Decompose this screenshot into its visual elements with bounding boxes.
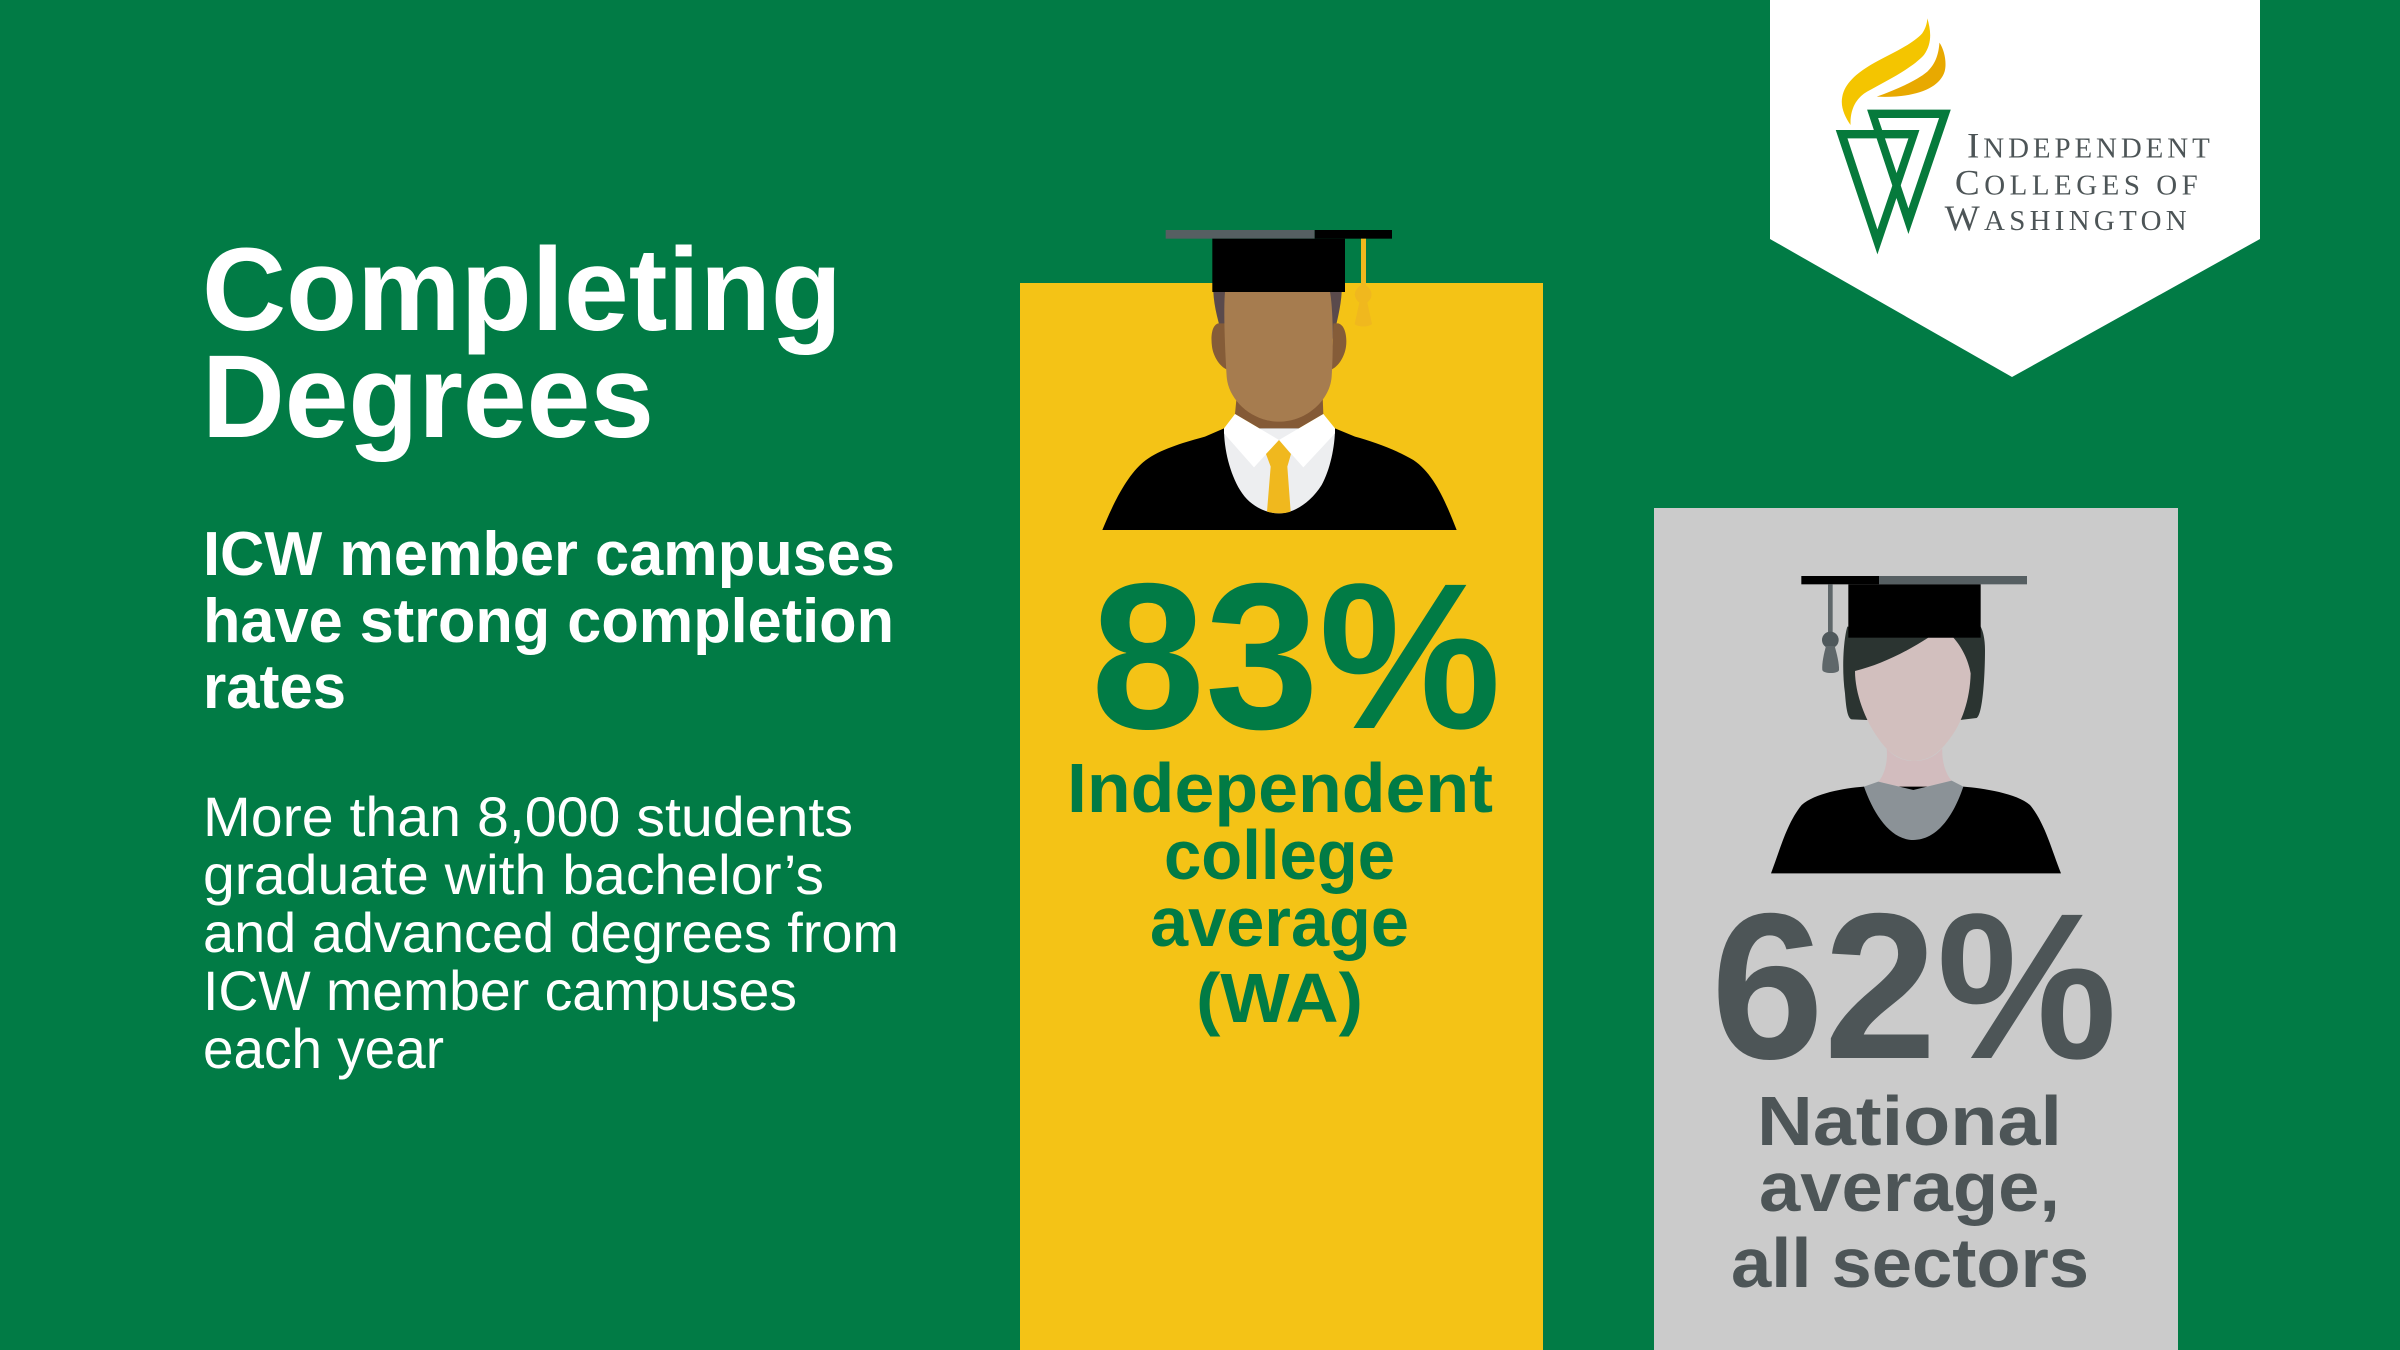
- logo banner: [1770, 0, 2260, 377]
- subheading: have strong completion: [203, 587, 894, 656]
- icon: male graduate: [1102, 230, 1457, 530]
- subheading: rates: [203, 653, 346, 722]
- icon: flame: [1842, 18, 1946, 125]
- body text: each year: [203, 1017, 444, 1080]
- panel: national average bar: [1654, 508, 2178, 1350]
- subheading: ICW member campuses: [203, 520, 895, 589]
- body text: graduate with bachelor’s: [203, 843, 824, 906]
- title: [202, 224, 842, 463]
- label: national average all sectors: all sectors: [1731, 1224, 2089, 1302]
- logo: torch mark and name: [1836, 18, 2210, 254]
- label: independent college average: college: [1164, 816, 1395, 894]
- label: independent college average: [1067, 749, 1493, 1037]
- subheading: [203, 520, 895, 722]
- logo name: COLLEGES OF: [1955, 162, 2198, 202]
- title: Degrees: [202, 331, 654, 463]
- body text: and advanced degrees from: [203, 901, 899, 964]
- label: national average all sectors: average,: [1759, 1148, 2060, 1226]
- label: national average all sectors: [1731, 1082, 2089, 1302]
- label: independent college average: (WA): [1196, 959, 1363, 1037]
- body text: ICW member campuses: [203, 959, 797, 1022]
- icon: W torch: [1836, 110, 1951, 254]
- label: independent college average: average: [1150, 883, 1409, 961]
- logo name: [1945, 125, 2210, 238]
- body text: More than 8,000 students: [203, 785, 853, 848]
- body text: [203, 785, 899, 1080]
- icon: female graduate: [1771, 576, 2061, 873]
- title: Completing: [202, 224, 842, 356]
- label: national average all sectors: National: [1757, 1082, 2062, 1160]
- stat: 83%: 83%: [1091, 541, 1501, 773]
- stat: 62%: 62%: [1711, 871, 2117, 1103]
- logo name: INDEPENDENT: [1967, 125, 2210, 165]
- panel: independent college bar: [1020, 230, 1543, 1350]
- logo name: WASHINGTON: [1945, 198, 2187, 238]
- label: independent college average: Independent: [1067, 749, 1493, 827]
